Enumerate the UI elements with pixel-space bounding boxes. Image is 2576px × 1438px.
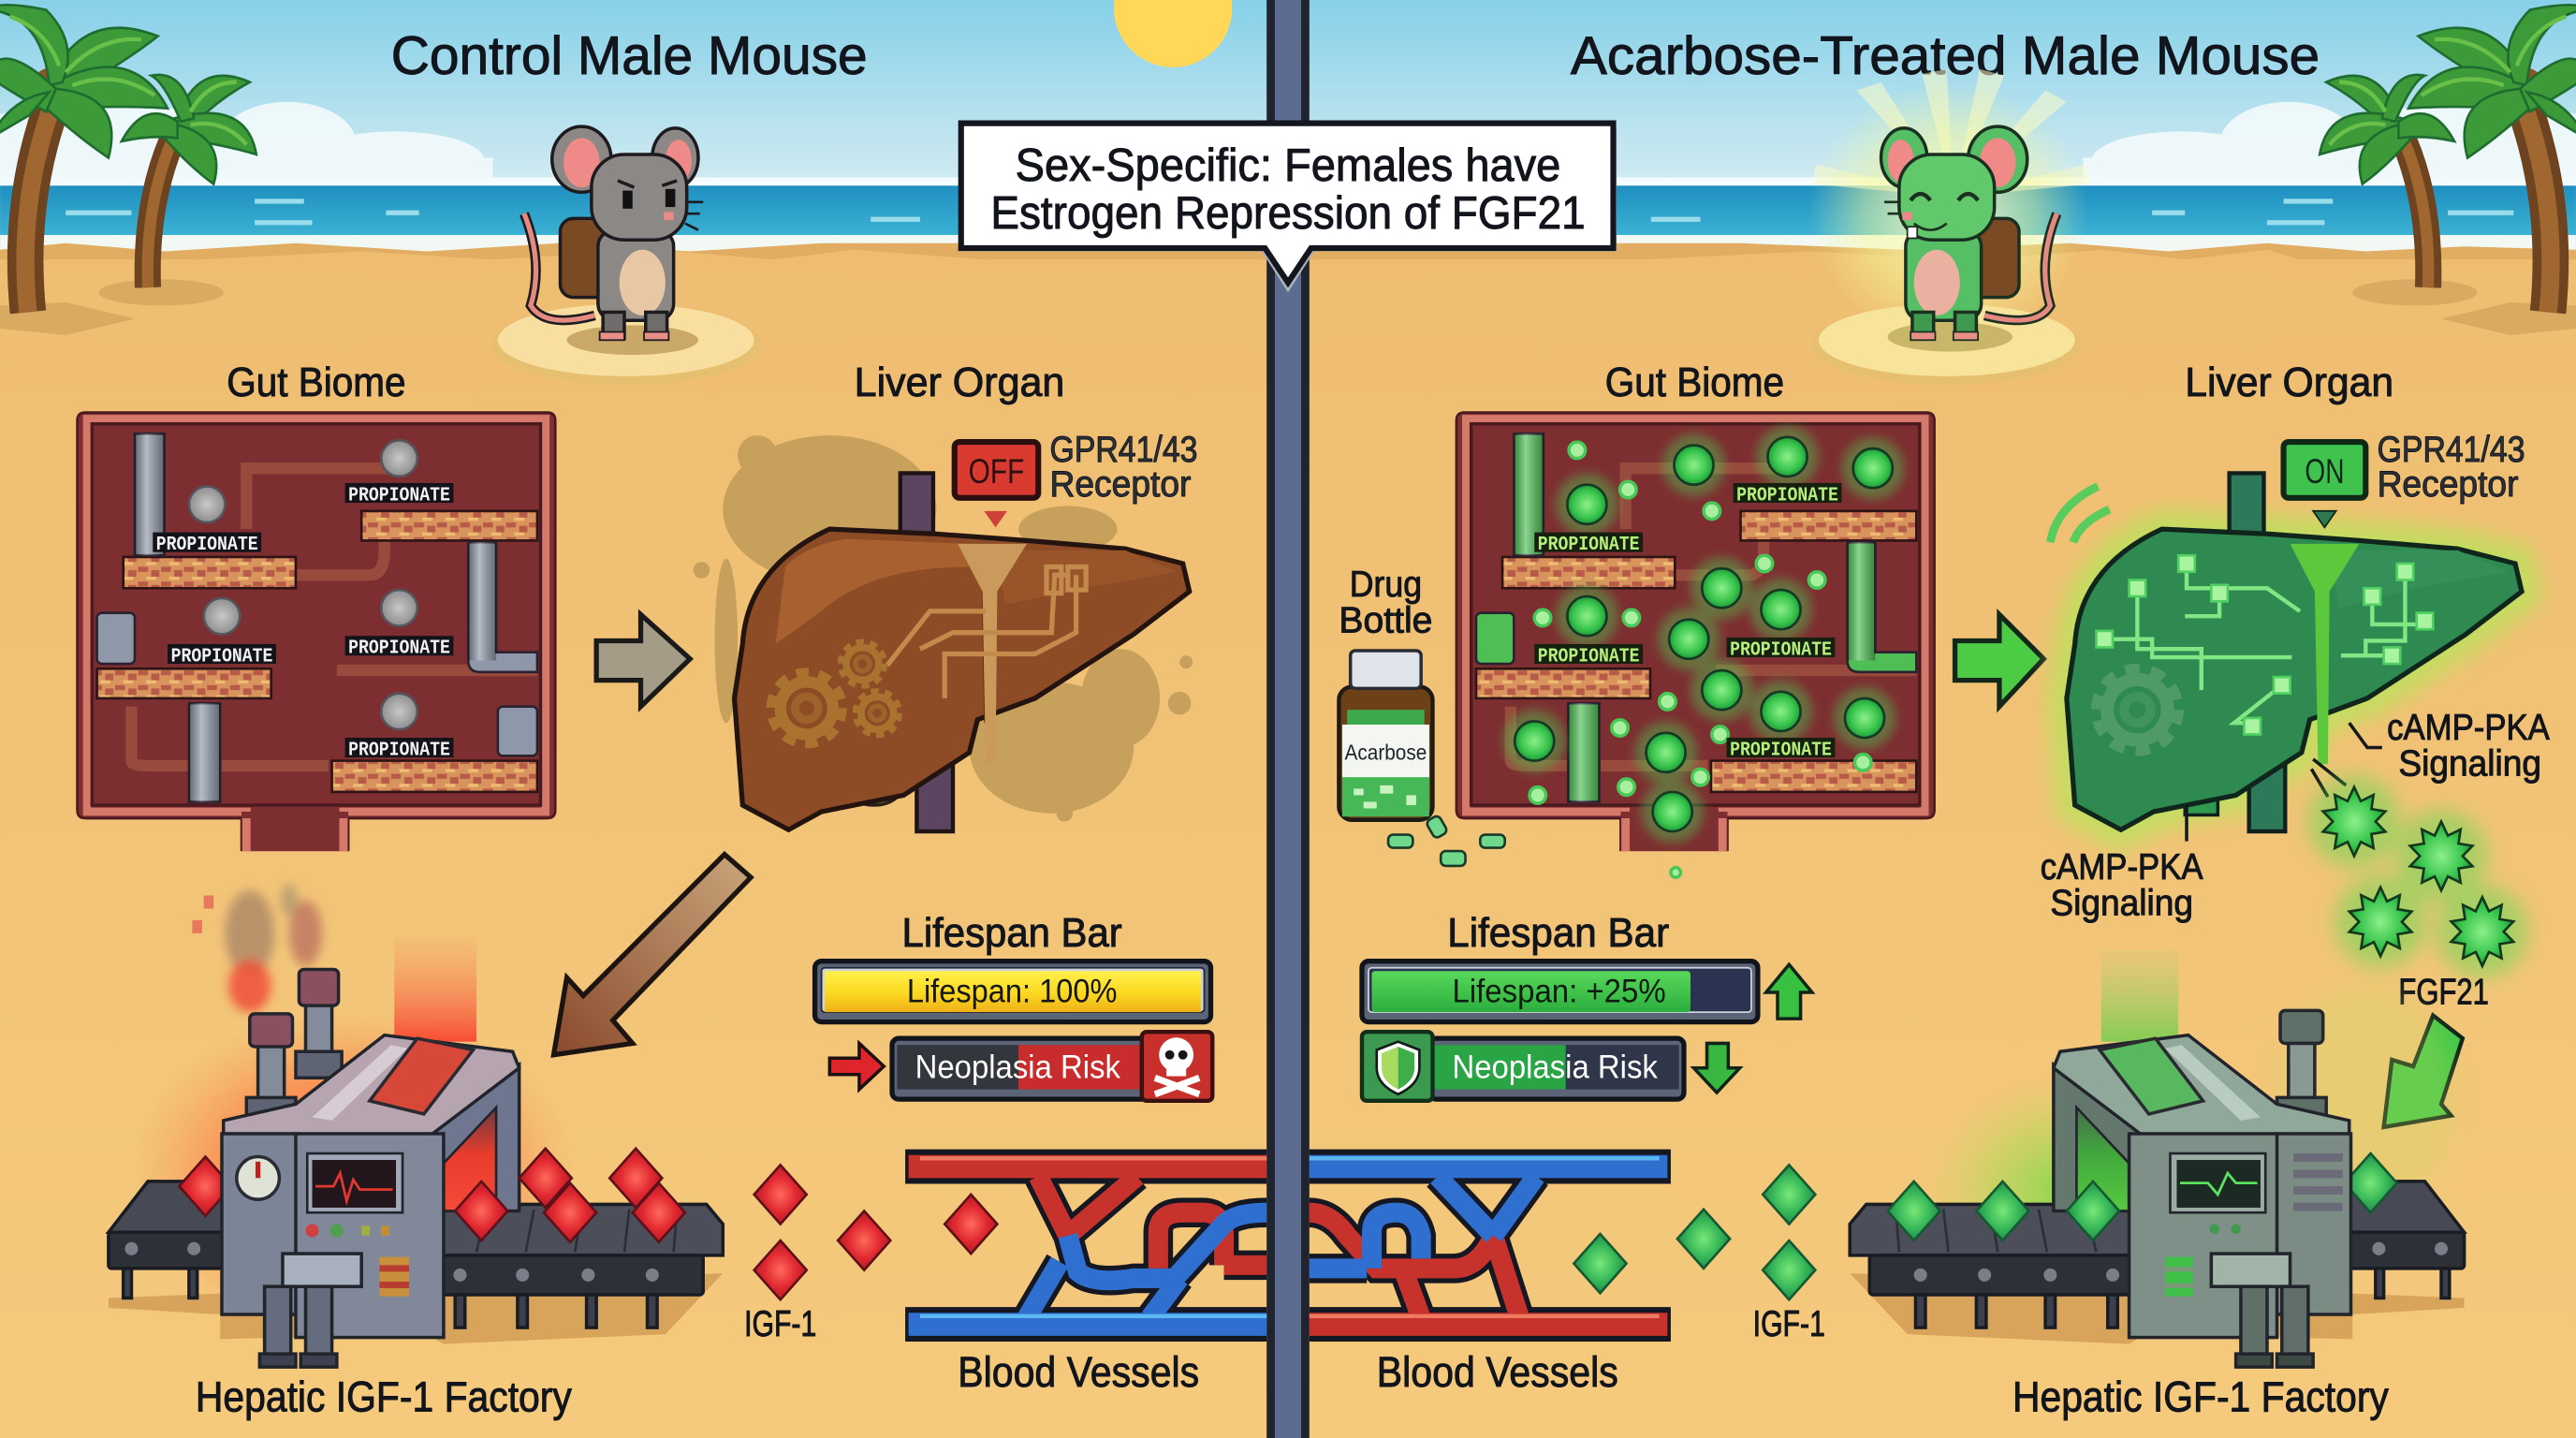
propionate labels: PROPIONATE [171,645,272,668]
label: IGF-1 treated: IGF-1 [1753,1304,1825,1344]
propionate labels: PROPIONATE [1736,484,1838,506]
IGF-1 crystals free treated [1573,1165,1815,1299]
lifespan heading: Lifespan Bar [902,910,1122,956]
propionate labels: PROPIONATE [348,484,450,506]
receptor label: GPR41/43 [2378,430,2525,470]
callout: sex-specific note: Sex-Specific: Females have [1016,140,1560,191]
arrow: lifespan up [1766,964,1812,1019]
IGF-1 crystals on belt [455,1149,685,1242]
gallbladder [844,762,903,805]
callout: cAMP-PKA signaling right: Signaling [2398,743,2541,784]
gear [2100,672,2175,748]
blood vessels network [905,1158,1671,1325]
conveyor back [2343,1181,2465,1298]
palm trees right [2320,5,2576,335]
conveyor front [1850,1204,2132,1328]
platform: control mouse [491,304,761,385]
receptor label: Receptor [1050,464,1192,505]
icon: acarbose bottle [1339,651,1505,866]
louvers [2293,1153,2343,1211]
callout: cAMP-PKA signaling lower [2041,805,2203,924]
dark casing [905,1167,1671,1325]
panel: liver treated [2050,430,2525,831]
ground shadow [1850,1273,2465,1344]
platform: treated mouse [1812,304,2082,385]
pipes below machine [259,1254,361,1367]
neoplasia risk bar [892,1038,1149,1099]
panel: factory treated [1850,949,2465,1367]
receptor label: GPR41/43 [1050,430,1197,470]
lifespan bar [815,961,1211,1022]
label: drug bottle: Drug [1350,565,1422,605]
palm trees left [0,5,256,335]
red vessels [909,1167,1667,1325]
propionate labels: PROPIONATE [156,534,258,556]
arrow: gut to liver control [596,614,690,707]
machine roof [2054,1035,2349,1140]
neoplasia risk bar: Neoplasia Risk [915,1049,1120,1085]
status stripes [2165,1257,2193,1297]
vessel bottom [2249,749,2285,831]
title: control: Control Male Mouse [391,26,868,86]
arrow: gut to liver treated [1955,614,2043,707]
label: gut biome treated: Gut Biome [1605,360,1784,405]
machine roof [224,1035,520,1140]
gauge [237,1157,279,1199]
spilled pills [1388,814,1505,866]
chimneys [246,969,342,1121]
ligament [958,544,1027,764]
arrow: liver to factory control [554,855,751,1055]
propionate labels: PROPIONATE [1538,645,1640,668]
conveyor left [109,1181,230,1298]
vessel top [900,473,933,542]
circuit traces [2104,564,2424,723]
machine arch side [419,1064,520,1211]
propionate labels: PROPIONATE [1730,739,1832,761]
label: liver organ control: Liver Organ [855,360,1064,405]
label: drug bottle: Bottle [1339,601,1432,641]
arrow: FGF21 to factory [2384,1016,2463,1127]
warning stripes [379,1257,409,1297]
liver body [735,529,1190,829]
neoplasia risk bar: Neoplasia Risk [1453,1049,1658,1085]
lifespan bar: Lifespan: 100% [907,974,1117,1010]
blue vessels [909,1167,1667,1325]
roof vent [370,1038,474,1114]
liver stain [694,435,1193,822]
mouse: control grey [524,126,703,340]
callout: cAMP-PKA signaling lower: Signaling [2050,884,2193,924]
label: gut biome control: Gut Biome [227,360,406,405]
signal arcs [2050,486,2110,542]
divider [1266,0,1310,1438]
receptor label: Receptor [2378,464,2519,505]
callout: cAMP-PKA signaling lower: cAMP-PKA [2041,847,2203,888]
liver body [2067,529,2522,829]
panel: liver control [694,430,1197,831]
receptor switch off: OFF [969,452,1024,491]
label: blood vessels treated: Blood Vessels [1377,1348,1618,1396]
label: IGF-1 control: IGF-1 [744,1304,816,1344]
label: liver organ treated: Liver Organ [2185,360,2393,405]
receptor label [1050,430,1197,505]
vent beam [2101,949,2178,1042]
icon: acarbose bottle: Acarbose [1345,741,1427,765]
lifespan heading: Lifespan Bar [1447,910,1669,956]
ground shadow [109,1273,723,1344]
circuit traces [887,566,1086,698]
factory glow [131,1010,575,1339]
callout: sex-specific note [961,124,1617,292]
factory glow [1922,1077,2234,1306]
vessel top [2230,473,2263,542]
treated mouse glow and rays [1808,69,2089,345]
panel: gut biome control [78,413,555,851]
neoplasia risk bar [1429,1038,1684,1099]
liver glow [2067,529,2522,829]
machine arch side [2054,1064,2154,1211]
smoke and vent [192,884,476,1042]
machine front [2276,1134,2351,1314]
label: blood vessels control: Blood Vessels [958,1348,1199,1396]
buttons [305,1224,389,1238]
monitor [2170,1153,2265,1212]
propionate labels: PROPIONATE [348,739,450,761]
propionate labels [1534,483,1841,761]
label: factory control: Hepatic IGF-1 Factory [196,1373,572,1421]
icon: shield [1362,1032,1432,1101]
gears [774,675,840,741]
label: drug bottle [1339,565,1432,641]
propionate labels: PROPIONATE [348,638,450,660]
IGF-1 crystals on belt [1888,1181,2119,1240]
receptor switch on [2284,442,2365,527]
receptor label [2378,430,2525,505]
pipes below machine [2211,1254,2313,1367]
receptor switch on: ON [2305,452,2344,491]
vessel bottom [916,749,953,831]
IGF-1 crystals free control [754,1165,997,1299]
arrow: risk steady [829,1043,884,1090]
label: factory treated: Hepatic IGF-1 Factory [2012,1373,2389,1421]
arrow: risk down [1693,1043,1740,1093]
icon: skull risk [1142,1032,1212,1101]
callout: cAMP-PKA signaling right: cAMP-PKA [2387,708,2550,748]
propionate coins [189,440,417,729]
chimney [2277,1010,2326,1121]
propionate labels: PROPIONATE [1730,638,1832,661]
receptor switch off [955,442,1038,527]
title: treated: Acarbose-Treated Male Mouse [1571,26,2320,86]
panel: lifespan control [815,910,1212,1101]
panel: factory control [109,884,723,1367]
sun [1114,0,1232,67]
panel: gut biome treated [1456,413,1935,877]
FGF21 particles [2308,775,2528,977]
lifespan bar: Lifespan: +25% [1453,974,1666,1010]
callout: sex-specific note: Estrogen Repression of FGF21 [990,188,1586,239]
propionate orbs [1515,437,1893,831]
machine front [222,1134,298,1314]
monitor [307,1153,402,1212]
roof vent [2100,1038,2203,1114]
ligament [2291,544,2359,764]
mouse: treated green [1881,126,2056,340]
panel: lifespan treated [1362,910,1812,1101]
glow halos [1503,426,1904,843]
propionate labels [153,483,453,761]
small particles [1530,442,1871,877]
propionate labels: PROPIONATE [1538,534,1640,556]
callout: cAMP-PKA signaling right [2311,708,2550,797]
vessel highlights [920,1158,1660,1316]
lifespan bar [1362,961,1758,1022]
conveyor right [440,1204,723,1328]
buttons [2210,1224,2241,1234]
label: FGF21: FGF21 [2398,972,2489,1012]
